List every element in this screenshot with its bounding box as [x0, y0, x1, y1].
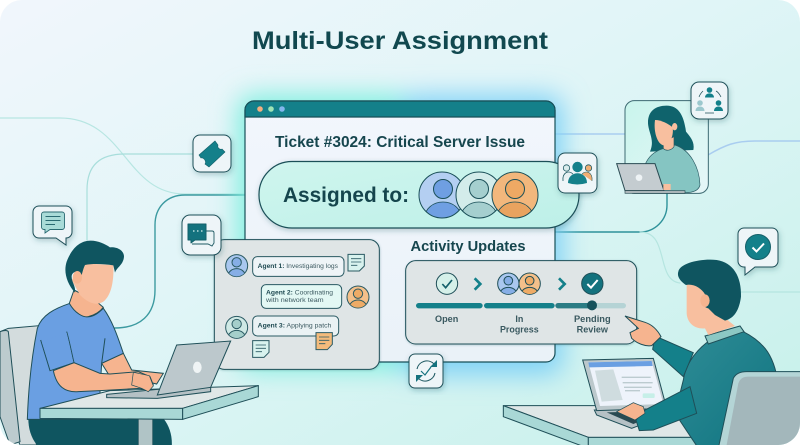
agent 2 row: with network team [265, 297, 324, 304]
progress bar [416, 300, 626, 310]
window dots [257, 106, 285, 112]
status labels: Progress [500, 324, 539, 334]
right desk [503, 406, 698, 445]
icon: sync [409, 354, 443, 388]
person: man at left desk [0, 241, 258, 445]
icon: ticket [193, 135, 231, 172]
right ear [700, 294, 710, 307]
woman card [625, 101, 708, 193]
left torso [27, 303, 123, 419]
activity heading: Activity Updates [410, 238, 526, 255]
woman body [643, 145, 700, 193]
window title bar [245, 101, 555, 117]
woman hair [648, 106, 694, 152]
right chair cushion [726, 377, 800, 445]
right raised arm [625, 316, 693, 377]
open step icon [436, 273, 458, 294]
panel: agent chat [214, 240, 379, 369]
panel: status tracker [406, 261, 637, 344]
left hand [132, 372, 153, 392]
left far arm [102, 353, 163, 384]
icon: team [558, 153, 597, 193]
arrow [475, 278, 480, 290]
arrow [559, 278, 565, 290]
in progress avatars [497, 272, 541, 295]
right hand [617, 403, 645, 420]
window glow [238, 95, 563, 375]
woman laptop [617, 164, 664, 191]
assigned pill [259, 162, 579, 232]
woman ear [672, 123, 677, 130]
panel: ticket window [245, 101, 555, 362]
left arm [53, 363, 153, 392]
left hair [65, 241, 124, 293]
left desk [40, 386, 258, 445]
icon: message speech bubble [33, 206, 72, 245]
left head [72, 263, 113, 304]
left neck [69, 290, 103, 317]
pending step icon [582, 273, 603, 294]
icon: chat bubbles [182, 215, 221, 255]
title: Multi-User Assignment [252, 27, 549, 55]
right hair [678, 260, 741, 321]
status labels: Review [577, 324, 608, 334]
status labels [435, 314, 611, 334]
right chair [718, 372, 800, 445]
avatar: blue [418, 172, 460, 218]
connector lines [0, 118, 800, 328]
status labels: Pending [574, 314, 611, 324]
agent 2 row [260, 284, 370, 309]
right lower arm [636, 387, 697, 431]
avatar: teal [456, 172, 497, 218]
left laptop [107, 341, 231, 398]
assigned label: Assigned to: [283, 183, 409, 207]
left ear [73, 271, 82, 284]
person: woman with laptop [617, 101, 708, 193]
right laptop [583, 358, 672, 428]
left chair [0, 326, 39, 445]
person: man at right desk [503, 260, 800, 445]
right face [687, 283, 735, 335]
icon: check speech bubble [738, 228, 778, 275]
status labels: Open [435, 314, 458, 324]
agent 1 row [225, 254, 365, 278]
status labels: In [515, 314, 523, 324]
right collar [705, 326, 744, 344]
avatar: orange [492, 172, 538, 218]
left sleeve fill [42, 333, 73, 370]
right torso [675, 332, 778, 445]
woman neck [663, 137, 674, 150]
agent 3 row: Agent 3: Applying patch [258, 322, 332, 329]
icon: group network [691, 82, 728, 119]
ticket heading: Ticket #3024: Critical Server Issue [275, 134, 525, 151]
agent 2 row: Agent 2: Coordinating [266, 290, 333, 297]
agent 3 row [226, 316, 339, 357]
agent 1 row: Agent 1: Investigating logs [258, 263, 338, 270]
left legs [28, 418, 172, 445]
woman face [655, 120, 673, 145]
left sleeve folds [41, 332, 105, 371]
